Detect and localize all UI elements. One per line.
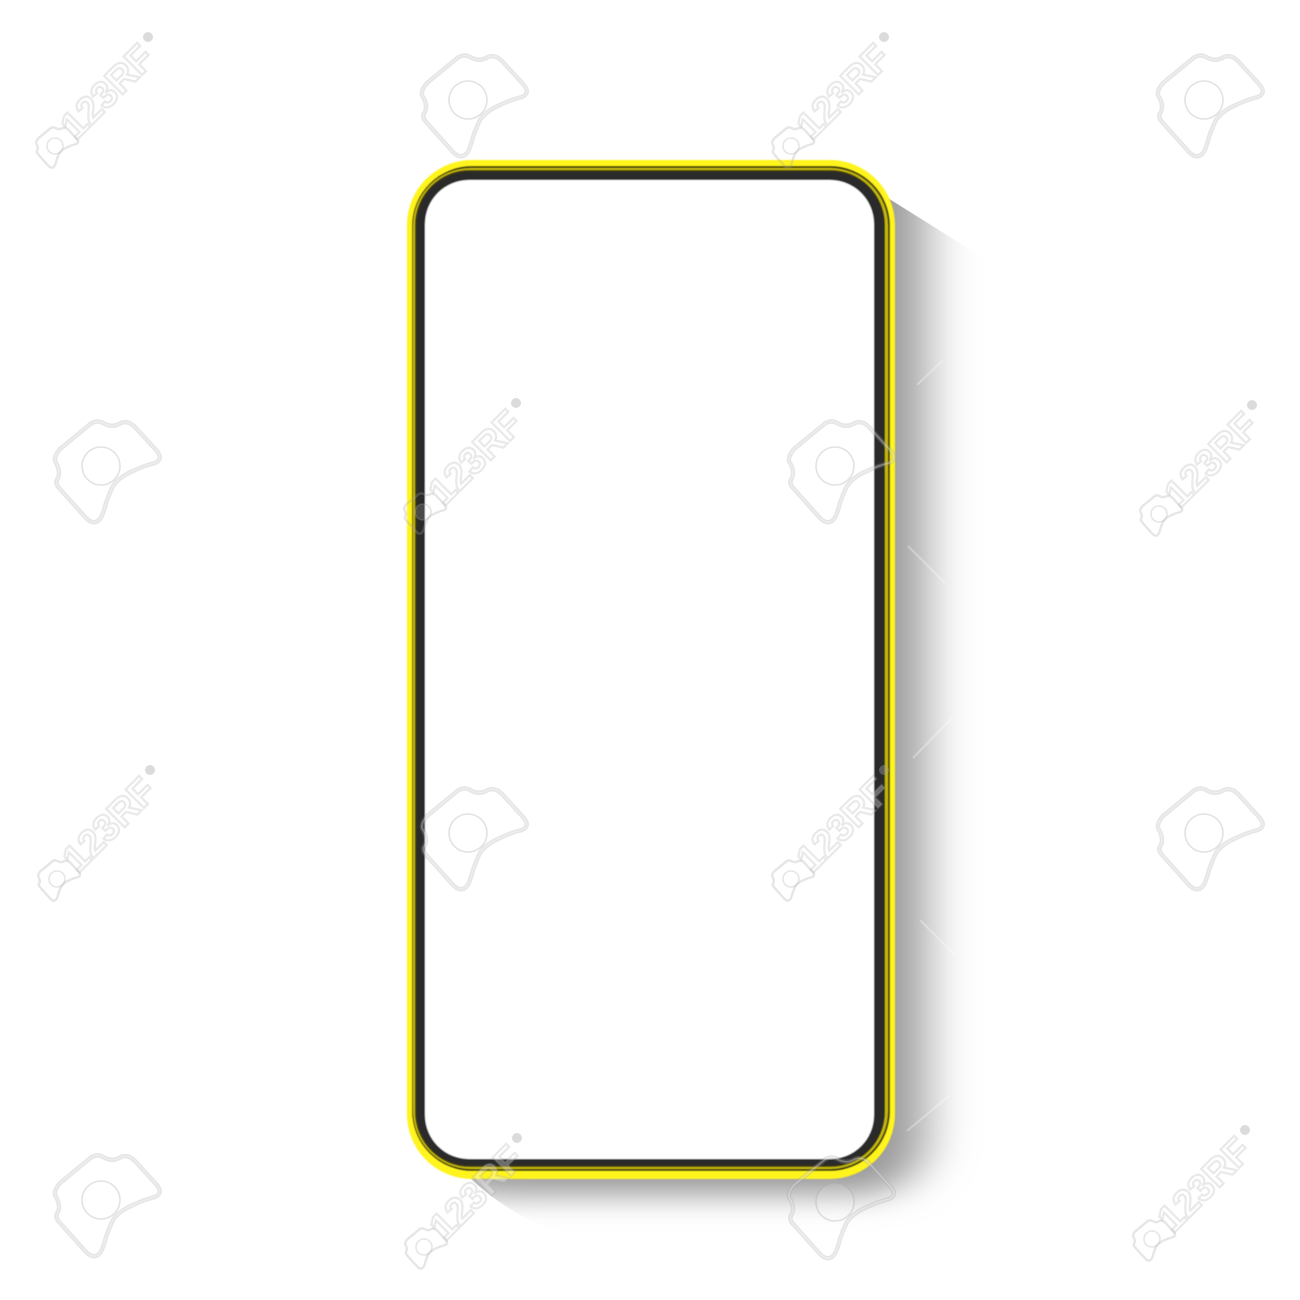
phone body (407, 160, 895, 1179)
dark olive band (415, 170, 885, 1167)
olive groove (412, 166, 890, 1171)
blank white screen (425, 180, 874, 1159)
watermark icon: bottom left (55, 1155, 160, 1256)
watermark icon: lower right (1158, 788, 1263, 889)
watermark icon: top centre (422, 55, 527, 156)
watermark: 123RF logo middle right: 123RF (1157, 405, 1267, 515)
watermark: 123RF logo bottom centre: 123RF (422, 1138, 532, 1248)
yellow outer frame (407, 160, 895, 1179)
watermark icon: lower centre (422, 788, 527, 889)
watermark: 123RF logo bottom right: 123RF (1150, 1130, 1260, 1240)
watermark: 123RF logo lower left: 123RF (55, 770, 165, 880)
watermark icon: bottom right (789, 1157, 894, 1258)
watermark: 123RF logo top centre: 123RF (789, 37, 899, 147)
watermark: 123RF logo lower centre: 123RF (789, 770, 899, 880)
watermark: 123RF logo top left: 123RF (53, 37, 163, 147)
inner gold stripe (413, 168, 888, 1169)
watermark icon: middle right of phone (789, 421, 894, 522)
watermark: 123RF logo middle left: 123RF (421, 403, 531, 513)
watermark icon: top right (1158, 55, 1263, 156)
watermark streaks over shadow (907, 360, 955, 1131)
charcoal bezel (417, 172, 884, 1165)
phone drop shadow (430, 130, 925, 1195)
watermark icon: middle left (55, 421, 160, 522)
